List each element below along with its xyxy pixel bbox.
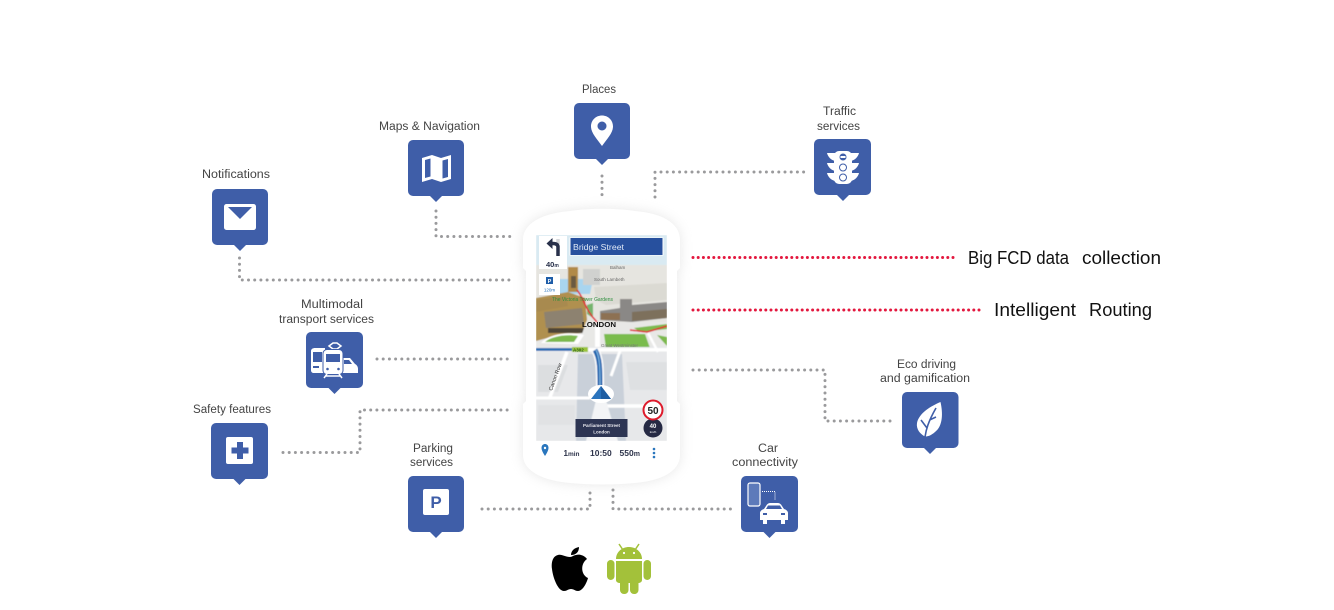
service: Maps & Navigation [379,121,480,202]
text: Big FCD data collection: collection [1082,248,1161,268]
phone screen map: Parliament Street [583,423,621,428]
icon: Apple logo [552,547,588,591]
icon: car [342,358,358,373]
icon: tram [329,343,341,349]
text: Intelligent Routing: Intelligent [994,300,1076,320]
callout lines: red dotted [693,258,983,310]
service: Multimodal transport services: transport services [279,314,374,326]
phone screen map: 40 [650,424,657,430]
phone screen map: Great Westminster [601,343,638,348]
church building [600,299,667,322]
service: Multimodal transport services: Multimodal [301,299,363,311]
service: Notifications: Notifications [202,169,270,181]
phone screen map: The Victoria Tower Gardens [552,297,613,303]
phone screen map: 50 [647,406,659,417]
bottom status bar: 10:50 [590,448,612,458]
phone screen map: South Lambeth [594,277,625,282]
text: Intelligent Routing: Routing [1089,300,1152,320]
phone screen map: 40m [546,260,559,269]
phone device [523,209,680,484]
infographic canvas [194,84,1160,594]
phone screen map: London [593,430,610,434]
service: Eco driving and gamification: Eco driving [897,359,956,371]
parking box [539,274,560,295]
service: Places [574,84,630,165]
icon: phone [748,483,760,506]
service: Car connectivity [732,443,798,538]
ground [536,320,600,328]
phone screen map [536,235,667,441]
turn box [539,236,567,269]
service: Parking services: services [410,457,453,469]
service: Parking services [408,443,464,538]
speed badges [644,418,662,438]
icon: car [760,503,788,524]
service: Eco driving and gamification [880,359,970,454]
service: Multimodal transport services [279,299,374,394]
street name bar [570,238,664,256]
icon: bus [311,348,325,373]
street label [576,419,628,437]
phone screen map: Canon Row [548,363,564,392]
icon: Android logo [607,544,651,594]
service: Safety features: Safety features [193,404,271,416]
phone screen map: 120m [544,288,555,292]
bottom status bar: 1min [564,449,580,458]
service: Safety features [193,404,271,485]
service: Car connectivity: connectivity [732,457,798,469]
service: Maps & Navigation: Maps & Navigation [379,121,480,133]
phone screen map: km/h [650,430,657,434]
phone screen map: A302 [573,348,584,352]
phone screen map: LONDON [582,322,616,329]
bottom status bar: 550m [620,448,640,458]
connector lines [240,172,893,509]
route [595,350,600,390]
service: Notifications [202,169,270,251]
service: Traffic services: Traffic [823,106,856,118]
service: Places: Places [582,84,616,96]
distant land and water [536,265,667,327]
lower blocks and roads [605,346,650,348]
service: Traffic services [814,106,871,201]
service: Eco driving and gamification: and gamification [880,373,970,385]
service: Car connectivity: Car [758,443,778,455]
text: Big FCD data collection [968,248,1161,268]
phone screen map: Bridge Street [573,242,625,252]
map labels: Balham [610,265,626,270]
text: Intelligent Routing [994,300,1152,320]
red traffic lines [577,290,667,332]
service: Traffic services: services [817,121,860,133]
bottom status bar [536,441,667,458]
service: Parking services: P [430,493,442,512]
phone screen map: P [548,279,552,285]
text: Big FCD data collection: Big FCD data [968,248,1070,268]
Parliament buildings [536,292,587,341]
service: Parking services: Parking [413,443,453,455]
position arrow [588,385,614,403]
